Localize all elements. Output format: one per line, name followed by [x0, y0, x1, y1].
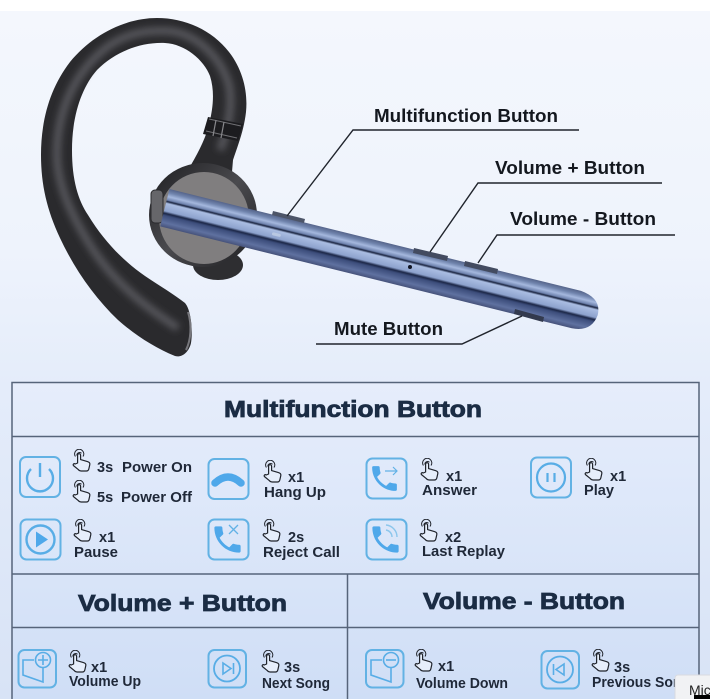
item: hang up: Hang Up [264, 485, 326, 501]
item: next song: Next Song [262, 676, 330, 692]
headset illustration [41, 18, 602, 356]
item: last replay [366, 519, 505, 560]
icon: answer call [366, 458, 406, 498]
callout: multifunction button [287, 105, 579, 216]
ear hook [41, 18, 246, 356]
callout: volume plus button [430, 157, 662, 252]
icon: press hand [73, 449, 90, 471]
item: power: 5s [97, 490, 113, 506]
button: volume minus [464, 261, 498, 274]
indicator light [272, 232, 281, 237]
icon: volume down [366, 650, 404, 688]
item: play: Play [584, 483, 614, 499]
item: volume up: Volume Up [69, 674, 141, 690]
heading: volume minus button: Volume - Button [423, 588, 625, 614]
item: reject call: Reject Call [263, 545, 340, 561]
item: power: Power On [122, 460, 192, 476]
button: multifunction [272, 211, 305, 223]
item: previous song: 3s [614, 660, 630, 676]
icon: pause symbol [531, 458, 571, 498]
item: previous song [542, 649, 690, 691]
boom microphone [160, 189, 602, 334]
callout: volume minus button [478, 208, 675, 263]
button function table [12, 382, 699, 699]
icon: redial [366, 520, 406, 560]
item: last replay: x2 [445, 530, 461, 546]
speaker disc [149, 163, 257, 267]
item: play [531, 458, 626, 499]
icon: play symbol [20, 520, 60, 560]
item: volume down: x1 [438, 659, 454, 675]
tooltip overlay [675, 675, 710, 699]
icon: previous track [542, 651, 579, 688]
callout: mute button: Mute Button [334, 318, 443, 339]
item: next song [208, 650, 330, 692]
item: hang up [208, 459, 326, 501]
item: power: Power Off [121, 490, 192, 506]
item: power: 3s [97, 460, 113, 476]
callout: multifunction button: Multifunction Button [374, 105, 558, 126]
icon: next track [208, 650, 246, 688]
item: answer: x1 [446, 469, 462, 485]
icon: volume up [18, 650, 56, 688]
icon: power [20, 457, 60, 497]
item: volume down: Volume Down [416, 676, 508, 692]
item: next song: 3s [284, 660, 300, 676]
item: reject call: 2s [288, 530, 304, 546]
item: volume up [18, 650, 141, 690]
item: pause [20, 519, 118, 561]
item: power [20, 449, 192, 506]
heading: volume plus button: Volume + Button [78, 590, 287, 616]
item: volume up: x1 [91, 660, 107, 676]
callout: volume minus button: Volume - Button [510, 208, 656, 229]
item: pause: Pause [74, 545, 118, 561]
heading: multifunction button: Multifunction Button [224, 396, 482, 422]
icon: reject call [208, 520, 248, 560]
item: answer: Answer [422, 483, 477, 499]
item: play: x1 [610, 469, 626, 485]
callout: volume plus button: Volume + Button [495, 157, 645, 178]
icon: hang up phone [208, 459, 248, 499]
item: volume down [366, 649, 508, 692]
item: previous song: Previous Song [592, 675, 690, 691]
item: last replay: Last Replay [422, 544, 505, 560]
item: hang up: x1 [288, 470, 304, 486]
item: pause: x1 [99, 530, 115, 546]
microphone hole [408, 265, 412, 269]
item: answer [366, 458, 477, 499]
ear bud [193, 250, 243, 280]
button: volume plus [413, 248, 448, 261]
button: mute [514, 309, 544, 322]
hook collar [203, 117, 243, 141]
callout: mute button [316, 316, 522, 344]
item: reject call [208, 519, 340, 561]
